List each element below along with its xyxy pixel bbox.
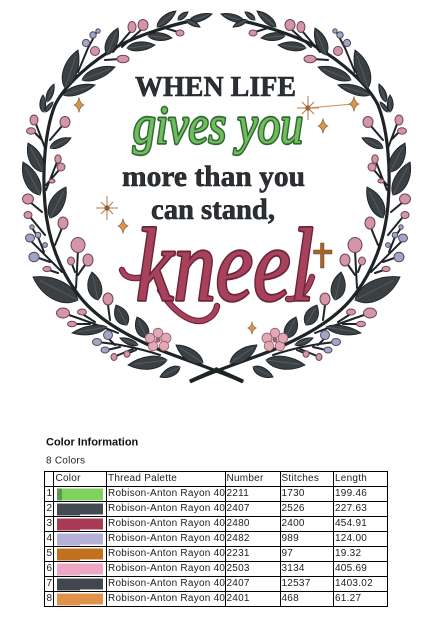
script flourishes on kneel [122, 270, 312, 321]
icon: starburst left [96, 196, 118, 220]
row 4: 124.00 [335, 533, 367, 544]
row 6: 405.69 [335, 563, 367, 574]
row 4 [46, 533, 367, 546]
row 1: Robison-Anton Rayon 40 [108, 488, 225, 499]
icon: sparkle below kneel [248, 322, 256, 334]
row 8: 8 [46, 593, 52, 604]
row 2: 2 [46, 503, 52, 514]
row 2 [46, 503, 367, 516]
row 4: 2482 [226, 533, 250, 544]
table header: Number [226, 473, 264, 484]
table header [56, 473, 367, 484]
row 8: 468 [282, 593, 299, 604]
row 3: Robison-Anton Rayon 40 [108, 518, 225, 529]
table header: Stitches [282, 473, 319, 484]
row 5: 19.32 [335, 548, 361, 559]
script: gives you: gives you [133, 95, 303, 155]
table header: Color [56, 473, 81, 484]
row 5: 97 [282, 548, 293, 559]
icon: starburst with connected sparkle [297, 96, 359, 120]
quote text [122, 71, 314, 323]
pink buds [22, 20, 184, 360]
row 6 [46, 563, 367, 576]
icon: sparkle right of gives you [318, 118, 328, 134]
heading: WHEN LIFE: WHEN LIFE [135, 71, 296, 103]
row 2: Robison-Anton Rayon 40 [108, 503, 225, 514]
table grid [44, 472, 388, 606]
row 1: 1730 [282, 488, 305, 499]
row 7: 12537 [282, 578, 311, 589]
table header: Thread Palette [108, 473, 177, 484]
row 4: 989 [282, 533, 299, 544]
row 6: 6 [46, 563, 52, 574]
row 5: 5 [46, 548, 52, 559]
row 1 [46, 488, 367, 500]
icon: sparkle upper left [74, 98, 84, 112]
left laurel branch [16, 8, 243, 382]
row 2: 2526 [282, 503, 305, 514]
row 7: 7 [46, 578, 52, 589]
row 3: 2480 [226, 518, 250, 529]
text: can stand,: can stand, [151, 193, 275, 226]
icon: cross [314, 243, 332, 268]
row 1: 2211 [226, 488, 249, 499]
row 3: 454.91 [335, 518, 367, 529]
row 4: Robison-Anton Rayon 40 [108, 533, 225, 544]
text: more than you: more than you [122, 160, 305, 193]
table header: Length [335, 473, 367, 484]
row 5: 2231 [226, 548, 250, 559]
row 1: 1 [46, 488, 52, 499]
heading: Color Information: Color Information [46, 436, 139, 448]
icon: sparkle left of kneel [118, 218, 128, 234]
stems [30, 20, 243, 382]
row 7: 2407 [226, 578, 250, 589]
row 3 [46, 518, 367, 530]
lilac buds [26, 29, 112, 353]
pink flower [145, 328, 171, 351]
row 8: Robison-Anton Rayon 40 [108, 593, 225, 604]
row 2: 227.63 [335, 503, 367, 514]
script: kneel: kneel [136, 208, 314, 323]
row 6: 3134 [282, 563, 305, 574]
row 8: 2401 [226, 593, 250, 604]
row 6: Robison-Anton Rayon 40 [108, 563, 225, 574]
leaves [16, 8, 213, 381]
row 8: 61.27 [335, 593, 361, 604]
row 5: Robison-Anton Rayon 40 [108, 548, 225, 559]
row 3: 2400 [282, 518, 305, 529]
row 6: 2503 [226, 563, 250, 574]
row 4: 4 [46, 533, 52, 544]
row 7: 1403.02 [335, 578, 373, 589]
table: thread colors [44, 472, 388, 606]
laurel wreath [16, 8, 417, 382]
right laurel branch [190, 8, 417, 382]
text: 8 Colors: 8 Colors [46, 456, 85, 466]
row 7: Robison-Anton Rayon 40 [108, 578, 225, 589]
row 2: 2407 [226, 503, 250, 514]
row 1: 199.46 [335, 488, 367, 499]
row 8 [46, 593, 361, 606]
row 7 [46, 578, 373, 590]
row 5 [46, 548, 361, 560]
row 3: 3 [46, 518, 52, 529]
